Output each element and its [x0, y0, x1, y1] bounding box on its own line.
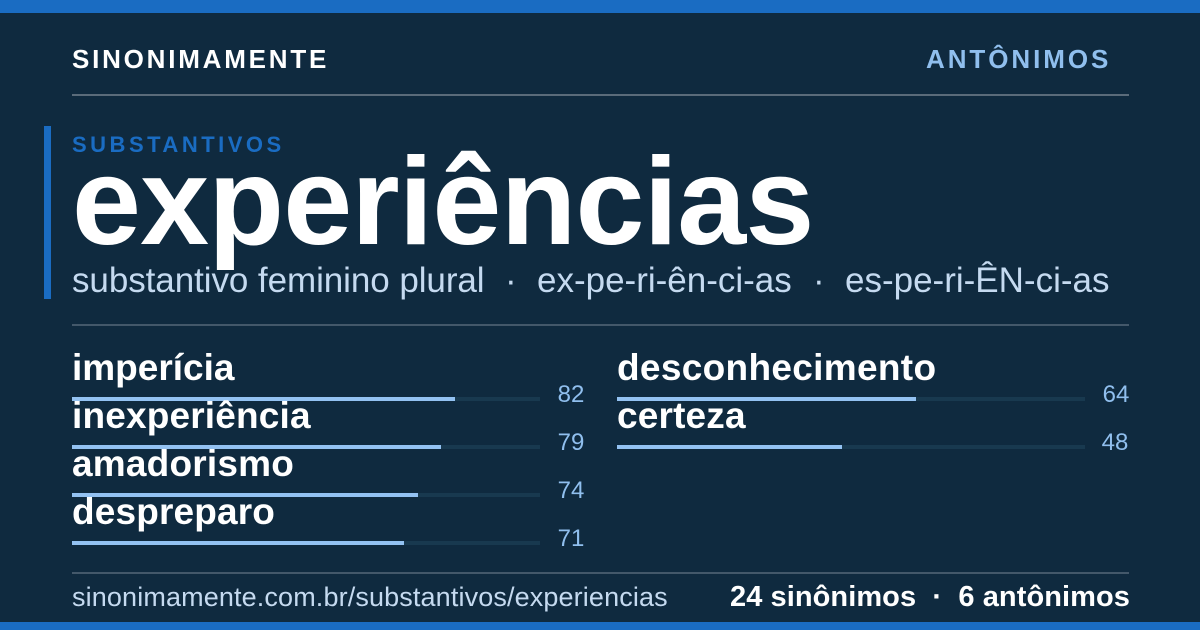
- row: amadorismo: 74: [558, 477, 584, 504]
- footer url: sinonimamente.com.br/substantivos/experiencias: [72, 582, 668, 612]
- row: desconhecimento: [617, 347, 1129, 408]
- grammar and pronunciation line: ·: [505, 261, 517, 300]
- brand name: SINONIMAMENTE: [72, 44, 329, 74]
- row: imperícia: imperícia: [72, 347, 234, 388]
- antonym list: [617, 347, 1129, 456]
- bottom accent bar: [0, 622, 1200, 630]
- headline word: experiências: [72, 133, 814, 271]
- section label: antônimos: ANTÔNIMOS: [926, 44, 1111, 74]
- category label: SUBSTANTIVOS: [72, 132, 285, 157]
- grammar and pronunciation line: ·: [813, 261, 825, 300]
- row: imperícia: [72, 347, 584, 408]
- row: inexperiência: [72, 395, 584, 456]
- grammar and pronunciation line: ex-pe-ri-ên-ci-as: [537, 261, 792, 300]
- footer counts: 24 sinônimos · 6 antônimos: [730, 581, 1130, 613]
- row: inexperiência: inexperiência: [72, 395, 311, 436]
- row: despreparo: despreparo: [72, 491, 275, 532]
- synonym list: [72, 347, 584, 552]
- grammar and pronunciation line: substantivo feminino plural: [72, 261, 485, 300]
- row: desconhecimento: 64: [1103, 381, 1129, 408]
- row: amadorismo: [72, 443, 584, 504]
- row: despreparo: 71: [558, 525, 584, 552]
- row: despreparo: [72, 491, 584, 552]
- row: inexperiência: 79: [558, 429, 584, 456]
- row: certeza: certeza: [617, 395, 746, 436]
- grammar and pronunciation line: [72, 261, 1109, 300]
- row: desconhecimento: desconhecimento: [617, 347, 936, 388]
- row: amadorismo: amadorismo: [72, 443, 294, 484]
- row: certeza: 48: [1102, 429, 1128, 456]
- row: certeza: [617, 395, 1128, 456]
- grammar and pronunciation line: es-pe-ri-ÊN-ci-as: [845, 261, 1109, 300]
- hero accent bar: [44, 126, 51, 299]
- row: imperícia: 82: [558, 381, 584, 408]
- top accent bar: [0, 0, 1200, 13]
